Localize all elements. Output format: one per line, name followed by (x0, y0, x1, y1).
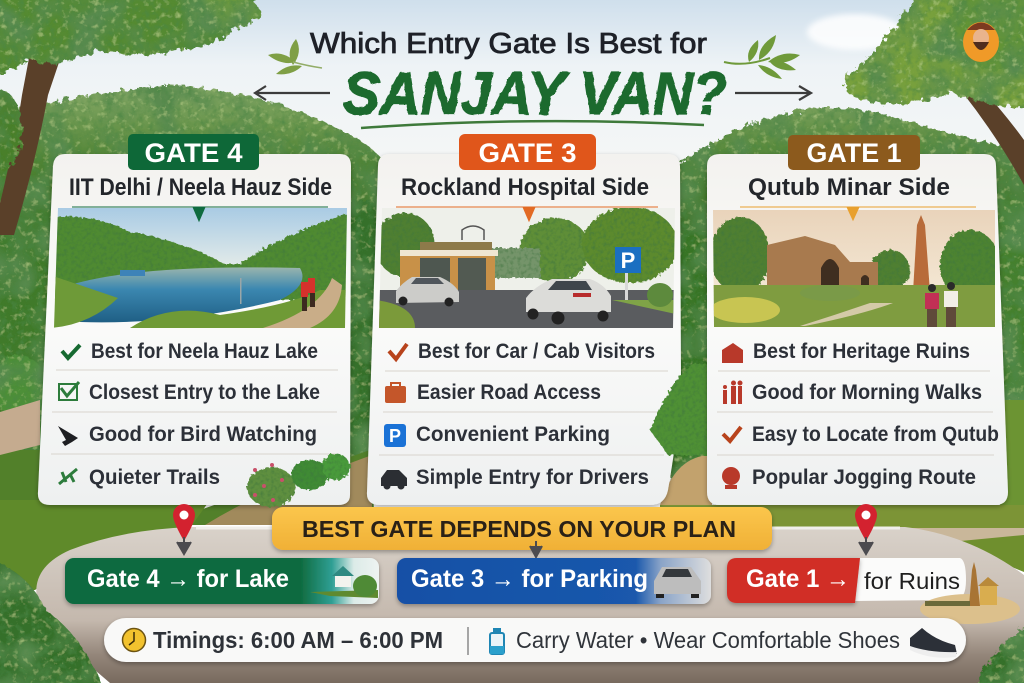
icon: shoe (910, 628, 957, 658)
gate badge (788, 135, 920, 170)
card (367, 154, 681, 505)
sign (625, 270, 628, 300)
panel: Gate 1 (707, 135, 1008, 505)
title: Sanjay Van: SANJAY VAN? (343, 60, 727, 127)
location heading: IIT Delhi / Neela Hauz Side (69, 174, 332, 201)
panel: Gate 3 (367, 134, 681, 505)
tree trunk (0, 0, 80, 235)
icon: jogging marker (722, 467, 740, 489)
row dividers (379, 371, 668, 455)
icon: lake pavilion (310, 566, 378, 598)
photo: gate entrance and parking (375, 207, 680, 328)
bush: bottom right (965, 612, 1024, 683)
row: Easier Road Access (417, 380, 601, 404)
icon: check (723, 427, 741, 441)
tree canopy (844, 0, 1024, 108)
gate badge: GATE 3 (478, 138, 576, 168)
bush: bottom left (0, 550, 112, 683)
pin: Gate 1 (855, 504, 877, 554)
pill: Gate 4 for Lake (65, 558, 379, 604)
row: Easy to Locate from Qutub (752, 422, 999, 446)
icon: ruins and tower (920, 562, 1020, 624)
row dividers (51, 370, 338, 454)
heading rule and pointer (396, 207, 658, 221)
gate badge (128, 134, 259, 170)
location heading: Rockland Hospital Side (401, 174, 649, 201)
photo: Neela Hauz lake (50, 208, 350, 328)
right tree (844, 0, 1024, 185)
row dividers (717, 371, 994, 455)
tree trunk (935, 50, 1024, 185)
icon: checked box (59, 382, 79, 400)
title underline (361, 121, 704, 128)
sky (0, 0, 1024, 220)
icon: parking (384, 424, 406, 447)
title block (255, 28, 811, 128)
row: Convenient Parking (416, 422, 610, 446)
panel: Gate 4 (38, 134, 351, 505)
row: Quieter Trails (89, 465, 220, 489)
card (38, 154, 351, 505)
row: Best for Neela Hauz Lake (91, 339, 318, 363)
icon: clock (122, 628, 146, 652)
title line: Which Entry Gate Is Best for (310, 28, 707, 60)
tips text: Carry Water • Wear Comfortable Shoes (516, 627, 900, 653)
timings text: Timings: 6:00 AM – 6:00 PM (153, 627, 443, 653)
bush: right of Gate 3 card (650, 363, 709, 455)
small car (396, 277, 459, 303)
icon: heritage house (722, 343, 743, 363)
pill: Gate 3 for Parking (397, 558, 711, 604)
row: Good for Morning Walks (752, 380, 982, 404)
icon: right leaves (724, 35, 800, 79)
card (707, 154, 1008, 505)
row: Best for Heritage Ruins (753, 339, 970, 363)
icon: bird (58, 426, 78, 446)
row: Closest Entry to the Lake (89, 380, 320, 404)
road (36, 527, 1024, 683)
tree canopy (0, 0, 265, 170)
photo: Qutub ruins (710, 208, 1000, 330)
heading rule and pointer (740, 207, 976, 220)
gate badge: GATE 1 (806, 138, 902, 168)
pill: Gate 3 for Parking: Gate 3 → for Parking (411, 565, 648, 593)
icon: check (62, 345, 80, 358)
banner: best gate depends on your plan: BEST GATE DEPENDS ON YOUR PLAN (302, 516, 736, 542)
row: Best for Car / Cab Visitors (418, 339, 655, 363)
arrow: right (735, 86, 811, 100)
row: Simple Entry for Drivers (416, 465, 649, 489)
feature rows (717, 339, 999, 489)
icon: check (389, 344, 407, 359)
left tree (0, 0, 265, 235)
icon: car (381, 470, 407, 490)
icon: walkers (723, 380, 742, 404)
arrow: left (255, 86, 330, 100)
arrow: Gate 3 (530, 541, 542, 557)
pill: Gate 1 for Ruins: for Ruins (864, 568, 960, 594)
row: Good for Bird Watching (89, 422, 317, 446)
gate badge: GATE 4 (144, 138, 242, 168)
pin: Gate 4 (173, 504, 195, 554)
heading rule and pointer (72, 207, 328, 221)
mid-ground trees (0, 85, 1024, 480)
icon: left leaves (268, 39, 322, 74)
info bar: timings and tips (104, 618, 966, 662)
icon: suitcase (385, 383, 406, 403)
cloud (807, 14, 903, 50)
icon: water bottle (490, 628, 504, 654)
separator (467, 627, 469, 655)
banner: best gate depends on your plan (196, 507, 900, 550)
photo: gate entrance and parking: P (621, 248, 635, 273)
row: Popular Jogging Route (752, 465, 976, 489)
location heading: Qutub Minar Side (748, 174, 950, 201)
pill: Gate 1 for Ruins: Gate 1 → (746, 565, 850, 593)
plants: over Gate 4 card corner (247, 454, 350, 507)
feature rows (51, 339, 338, 489)
pill: Gate 4 for Lake: Gate 4 → for Lake (87, 565, 289, 593)
feature rows (379, 339, 668, 490)
icon: explorer logo (963, 22, 999, 62)
pill: Gate 1 for Ruins (727, 558, 1020, 624)
icon: car front (654, 567, 701, 598)
icon: trail leaves (59, 469, 77, 484)
icon: parking: P (389, 426, 401, 446)
ground and grass (0, 450, 375, 525)
gate badge (459, 134, 596, 170)
main car (526, 279, 611, 312)
